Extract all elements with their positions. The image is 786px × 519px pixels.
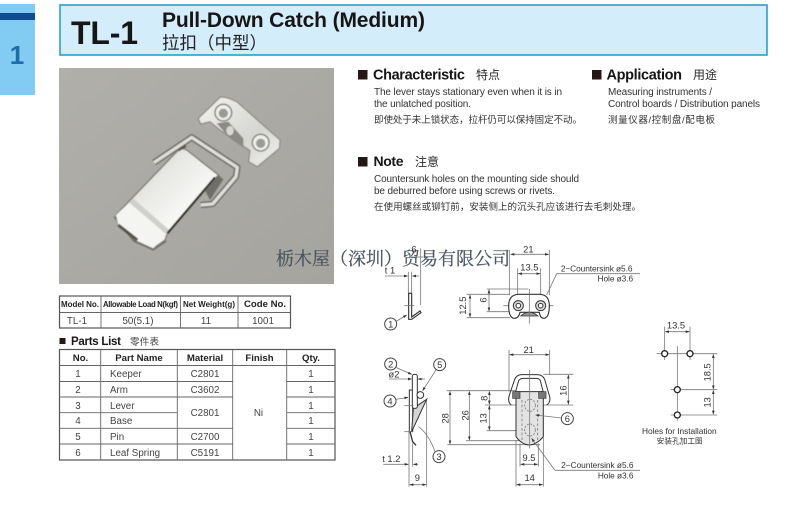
characteristic text: The lever stays stationary even when it is in [374, 87, 562, 98]
parts list table: 1 [308, 401, 314, 412]
parts list table: Finish [245, 353, 274, 364]
keeper drawing [385, 244, 640, 330]
parts list heading: Parts List [71, 336, 121, 348]
note block: 在使用螺丝或铆钉前，安装侧上的沉头孔应该进行去毛刺处理。 [374, 201, 641, 213]
front view: 26 [460, 410, 470, 421]
side view: 4 [387, 396, 393, 406]
parts list table: 1 [308, 448, 314, 459]
specification table: 11 [201, 316, 211, 327]
note block [358, 153, 641, 213]
keeper drawing: 12.5 [458, 297, 468, 315]
product name Chinese: 拉扣（中型） [162, 33, 267, 53]
front view: 8 [479, 396, 489, 401]
product photo [59, 68, 334, 284]
parts list table: 1 [308, 385, 314, 396]
application heading: Application [606, 68, 682, 84]
parts list table: 3 [75, 401, 81, 412]
specification table: TL-1 [67, 316, 87, 327]
section number: 1 [10, 40, 24, 70]
model number: TL-1 [71, 15, 138, 51]
keeper drawing: Hole ø3.6 [597, 274, 634, 284]
side view: 3 [436, 452, 442, 462]
front view: Hole ø3.6 [598, 471, 634, 481]
parts list table: Arm [110, 385, 128, 396]
installation holes drawing [642, 321, 717, 445]
characteristic block [358, 67, 582, 126]
parts list table: Base [110, 416, 133, 427]
parts list table: C5191 [191, 448, 219, 459]
front view [441, 345, 640, 487]
parts list table: Ni [254, 408, 263, 419]
parts list table: Part Name [115, 353, 163, 364]
parts list heading: 零件表 [130, 336, 159, 348]
parts list table: 1 [308, 416, 314, 427]
section tab [0, 4, 35, 95]
front view: 9.5 [523, 453, 535, 463]
front view: 21 [523, 345, 534, 355]
parts list table: Pin [110, 432, 124, 443]
note block: 注意 [415, 154, 439, 169]
application block: 测量仪器/控制盘/配电板 [608, 114, 715, 126]
side view [382, 358, 446, 487]
parts list table: C2801 [191, 369, 219, 380]
parts list table: Lever [110, 401, 135, 412]
keeper drawing: 6 [411, 244, 417, 254]
note block: be deburred before using screws or rivets. [374, 186, 555, 197]
characteristic block: 特点 [476, 67, 500, 82]
side view: 9 [415, 473, 420, 483]
application block: Control boards / Distribution panels [608, 99, 760, 110]
side view: ø2 [389, 369, 399, 379]
specification table [60, 296, 290, 328]
parts list table: 1 [308, 432, 314, 443]
parts list table: 1 [75, 369, 81, 380]
installation holes drawing: 安装孔加工图 [657, 435, 703, 445]
installation holes drawing: 13.5 [667, 321, 685, 331]
installation holes drawing: 13 [703, 397, 713, 408]
parts list heading [60, 336, 159, 348]
application text: Measuring instruments / [608, 87, 712, 98]
application block [592, 67, 760, 126]
installation holes drawing: 18.5 [703, 363, 713, 381]
keeper drawing: 13.5 [520, 262, 538, 272]
characteristic block: the unlatched position. [374, 99, 471, 110]
specification table: Allowable Load N(kgf) [103, 300, 178, 309]
parts list table: 4 [75, 416, 81, 427]
keeper drawing: t 1 [385, 266, 395, 276]
parts list table: No. [73, 353, 88, 364]
front view: 2−Countersink ø5.6 [561, 460, 634, 470]
note text: Countersunk holes on the mounting side should [374, 174, 579, 185]
parts list table [60, 350, 335, 460]
front view: 16 [559, 385, 569, 396]
parts list table: Leaf Spring [110, 448, 160, 459]
side view: t 1.2 [382, 454, 400, 464]
specification table: Net Weight(g) [183, 300, 235, 309]
specification table: Code No. [244, 299, 286, 310]
parts list table: C3602 [191, 385, 219, 396]
parts list table: Material [187, 353, 223, 364]
parts list table: Qty. [302, 353, 320, 364]
watermark: 栃木屋（深圳）贸易有限公司 [276, 245, 510, 271]
specification table: Model No. [61, 300, 99, 309]
parts list table: 1 [308, 369, 314, 380]
parts list table: 6 [75, 448, 81, 459]
parts list table: 5 [75, 432, 81, 443]
parts list table: C2700 [191, 432, 220, 443]
side view: 5 [437, 360, 442, 370]
parts list table: 2 [75, 385, 81, 396]
front view: 13 [479, 413, 489, 424]
catch assembly drawing [382, 345, 640, 487]
keeper drawing: 1 [388, 319, 393, 329]
front view: 14 [524, 473, 535, 483]
application block: 用途 [693, 67, 717, 82]
title banner [60, 5, 767, 55]
front view: 6 [565, 414, 570, 424]
front view: 28 [441, 413, 451, 424]
side view: 2 [388, 359, 393, 369]
characteristic block: 即使处于未上锁状态，拉杆仍可以保持固定不动。 [374, 114, 582, 126]
installation holes drawing: Holes for Installation [642, 426, 717, 436]
keeper drawing: 6 [479, 297, 489, 303]
product name: Pull-Down Catch (Medium) [162, 9, 425, 32]
note heading: Note [374, 153, 404, 169]
keeper drawing: 2−Countersink ø5.6 [561, 264, 633, 274]
parts list table: C2801 [191, 408, 219, 419]
specification table: 50(5.1) [122, 316, 154, 327]
characteristic heading: Characteristic [373, 68, 465, 84]
keeper drawing: 21 [523, 244, 534, 254]
specification table: 1001 [252, 316, 274, 327]
parts list table: Keeper [110, 369, 142, 380]
